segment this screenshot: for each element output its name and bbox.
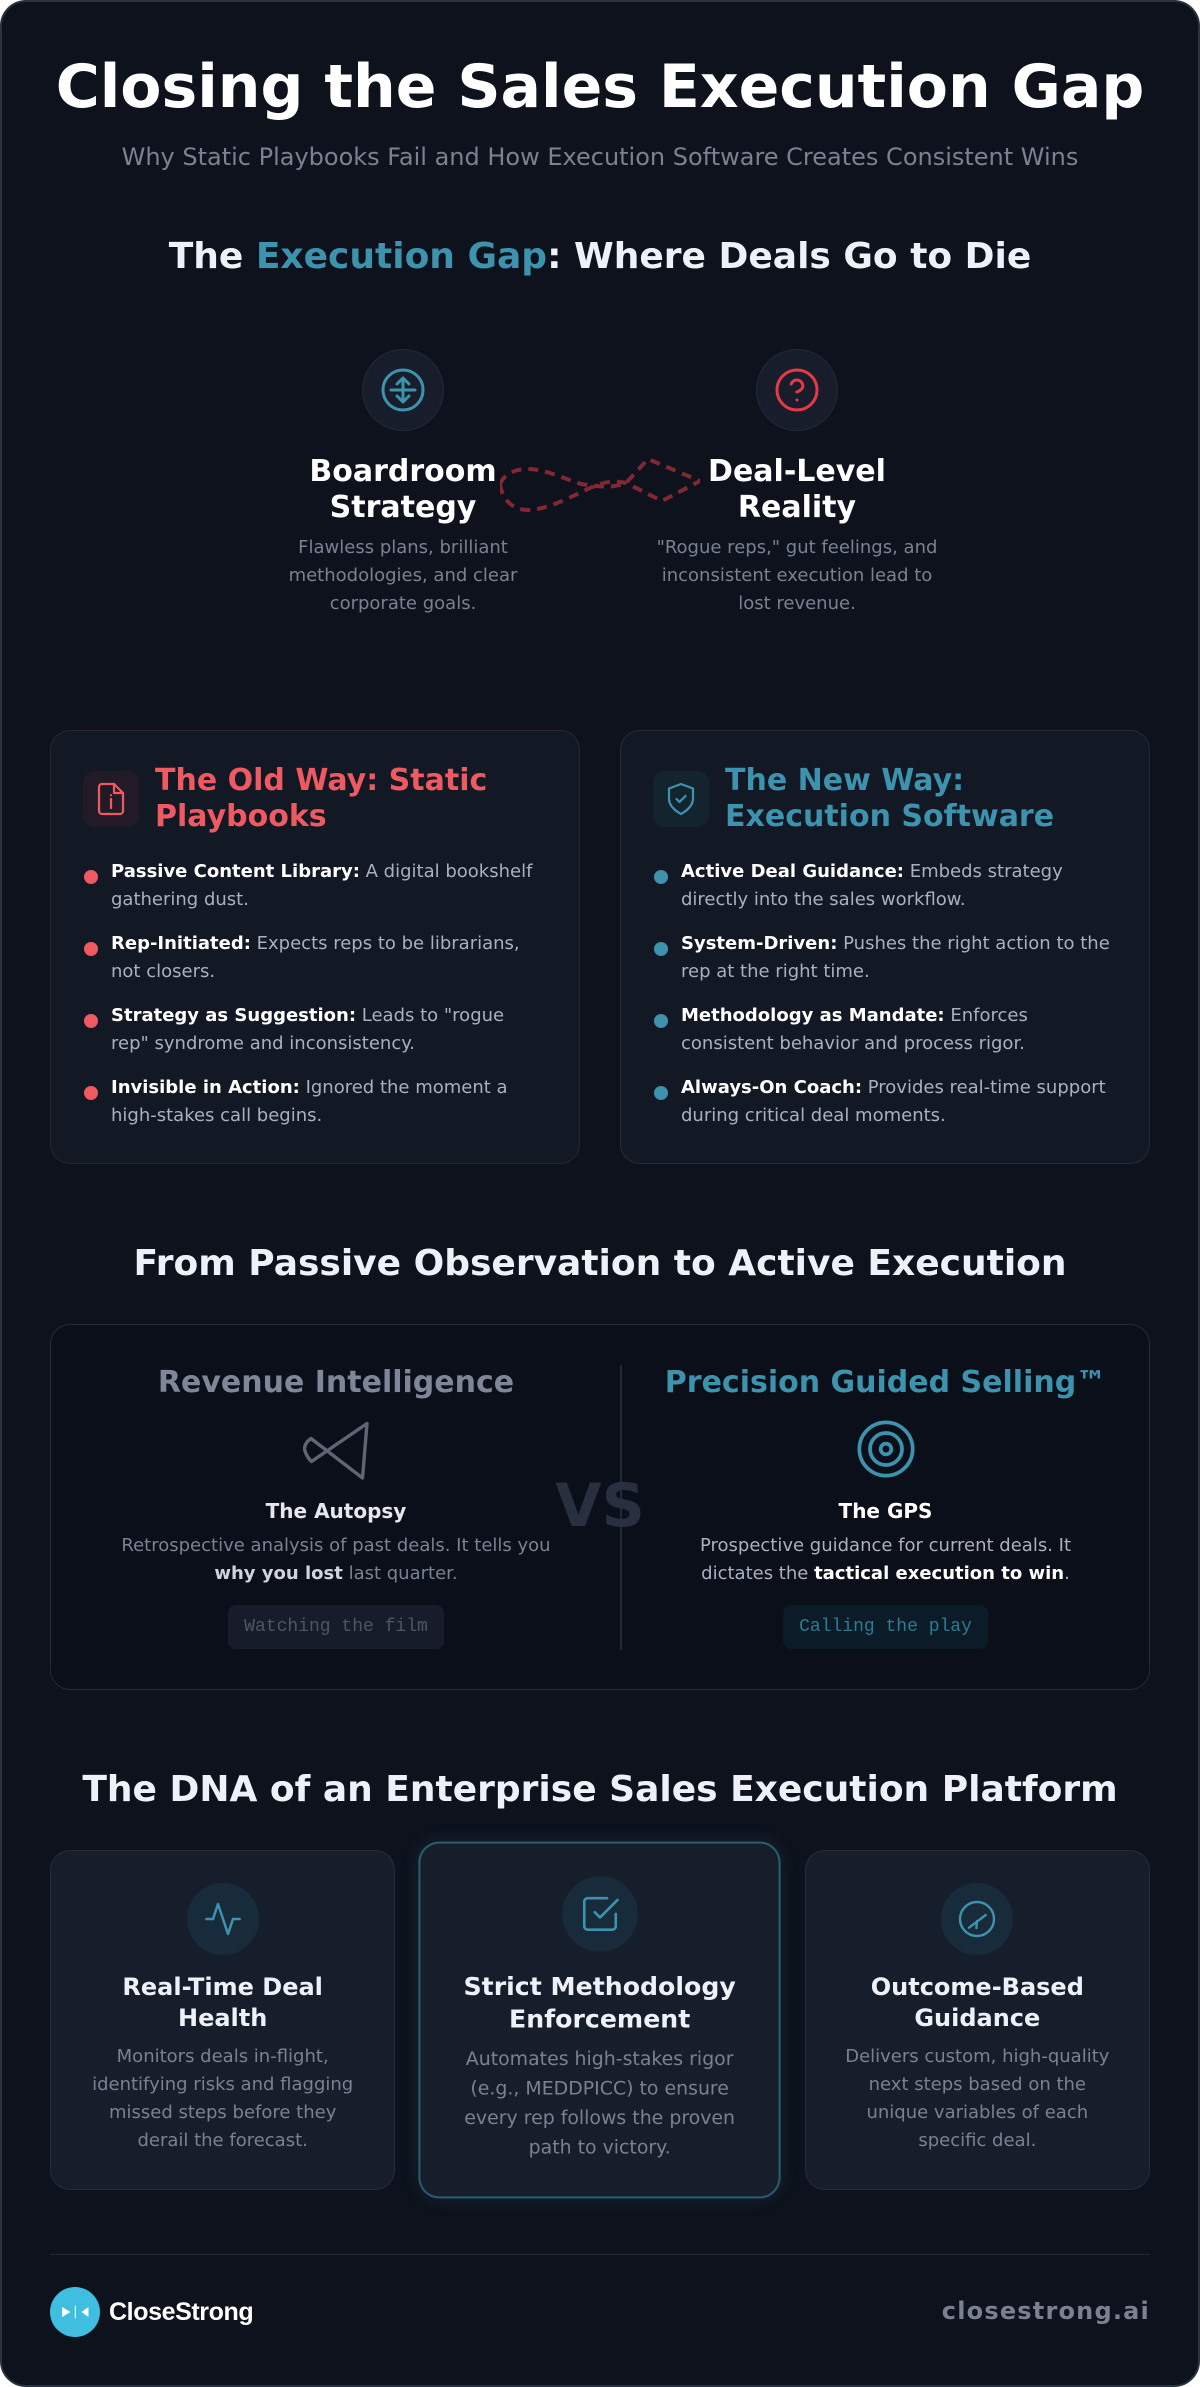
tag: watching the film (228, 1605, 444, 1649)
item (111, 1077, 508, 1126)
bullet (84, 942, 98, 956)
autopsy description (121, 1535, 551, 1584)
logo wordmark: CloseStrong (109, 2298, 253, 2326)
bullet (654, 870, 668, 884)
card description (92, 2046, 353, 2151)
card description (845, 2046, 1109, 2151)
panel: real-time deal health (50, 1850, 395, 2190)
card description: next steps based on the (869, 2074, 1086, 2095)
old way heading: The Old Way: Static (155, 762, 487, 798)
old way heading: Playbooks (155, 798, 327, 834)
panel: outcome-based guidance (805, 1850, 1150, 2190)
card description: specific deal. (918, 2130, 1036, 2151)
card description: Monitors deals in-flight, (117, 2046, 329, 2067)
GPS subheading: The GPS (839, 1499, 932, 1523)
boardroom description: Flawless plans, brilliant (298, 536, 508, 558)
panel: deal-level reality (657, 349, 937, 614)
card title (464, 1972, 736, 2034)
bullet (84, 1086, 98, 1100)
reality heading: Deal-Level (708, 454, 886, 489)
title: Closing the Sales Execution Gap (56, 52, 1144, 122)
card description (465, 2048, 735, 2159)
autopsy description: Retrospective analysis of past deals. It tells you (121, 1535, 551, 1556)
item: rep" syndrome and inconsistency. (111, 1033, 415, 1054)
logo mark (50, 2287, 100, 2337)
card description: missed steps before they (109, 2102, 336, 2123)
icon: gauge dial (941, 1883, 1013, 1955)
bullet (84, 870, 98, 884)
icon: question circle (756, 349, 838, 431)
item: Rep-Initiated: Expects reps to be librarians, (111, 933, 520, 954)
icon: target (858, 1420, 914, 1478)
card description: path to victory. (529, 2137, 671, 2159)
reality description: "Rogue reps," gut feelings, and (657, 536, 937, 558)
heading: passive to active: From Passive Observation to Active Execution (133, 1242, 1067, 1284)
panel: boardroom strategy (289, 349, 518, 614)
card title: Strict Methodology (464, 1972, 736, 2001)
item (681, 1077, 1106, 1126)
panel: revenue intelligence versus precision guided selling (50, 1324, 1150, 1690)
item: Strategy as Suggestion: Leads to "rogue (111, 1005, 504, 1026)
item: directly into the sales workflow. (681, 889, 966, 910)
reality description: lost revenue. (738, 592, 856, 614)
new way heading: Execution Software (725, 798, 1054, 834)
reality description (657, 536, 937, 614)
reality heading (708, 454, 886, 525)
autopsy description: why you lost last quarter. (214, 1563, 458, 1584)
heading: the DNA: The DNA of an Enterprise Sales Execution Platform (82, 1769, 1118, 1810)
item: Passive Content Library: A digital bookshelf (111, 861, 532, 882)
item: during critical deal moments. (681, 1105, 946, 1126)
revenue intelligence heading: Revenue Intelligence (158, 1364, 514, 1400)
item: System-Driven: Pushes the right action to the (681, 933, 1110, 954)
item (681, 861, 1063, 910)
boardroom heading (309, 454, 497, 525)
icon: file info (83, 771, 139, 827)
item: not closers. (111, 961, 215, 982)
card description: identifying risks and flagging (92, 2074, 353, 2095)
item (681, 933, 1110, 982)
new way heading (725, 762, 1054, 834)
GPS description (700, 1535, 1071, 1584)
reality heading: Reality (738, 490, 856, 525)
item (111, 1005, 504, 1054)
item: rep at the right time. (681, 961, 870, 982)
VS label: VS (555, 1471, 645, 1541)
GPS description: dictates the tactical execution to win. (701, 1563, 1070, 1584)
item: Invisible in Action: Ignored the moment a (111, 1077, 508, 1098)
precision guided selling heading: Precision Guided Selling™ (665, 1364, 1106, 1400)
item: Active Deal Guidance: Embeds strategy (681, 861, 1063, 882)
card description: every rep follows the proven (465, 2107, 735, 2129)
new way list (654, 861, 1110, 1126)
card description: unique variables of each (866, 2102, 1088, 2123)
icon: activity pulse (187, 1883, 259, 1955)
subtitle: Why Static Playbooks Fail and How Execution Software Creates Consistent Wins (122, 143, 1078, 171)
boardroom description (289, 536, 518, 614)
column: precision guided selling (665, 1364, 1106, 1649)
card description: (e.g., MEDDPICC) to ensure (471, 2078, 729, 2100)
boardroom heading: Strategy (330, 490, 476, 525)
tag: calling the play: Calling the play (799, 1617, 972, 1637)
item: Always-On Coach: Provides real-time support (681, 1077, 1106, 1098)
website: closestrong.ai (942, 2297, 1150, 2325)
bullet (84, 1014, 98, 1028)
icon: check square (562, 1876, 638, 1952)
panel: strict methodology enforcement (419, 1841, 781, 2199)
panel: the new way (620, 730, 1150, 1164)
reality description: inconsistent execution lead to (662, 564, 932, 586)
item: high-stakes call begins. (111, 1105, 322, 1126)
column: revenue intelligence (121, 1364, 551, 1649)
bullet (654, 1014, 668, 1028)
bullet (654, 1086, 668, 1100)
card title: Guidance (914, 2004, 1040, 2032)
item: gathering dust. (111, 889, 249, 910)
card title (122, 1973, 323, 2032)
new way heading: The New Way: (725, 762, 964, 798)
item (111, 861, 533, 910)
tag: calling the play (783, 1605, 988, 1649)
icon: autopsy (303, 1422, 369, 1480)
icon: shield check (653, 771, 709, 827)
item: consistent behavior and process rigor. (681, 1033, 1025, 1054)
boardroom description: corporate goals. (330, 592, 476, 614)
item (111, 933, 520, 982)
card title: Outcome-Based (871, 1973, 1084, 2001)
panel: the old way (50, 730, 580, 1164)
boardroom heading: Boardroom (309, 454, 497, 489)
item (681, 1005, 1028, 1054)
autopsy subheading: The Autopsy (266, 1499, 406, 1523)
card title (871, 1973, 1084, 2032)
bullet (654, 942, 668, 956)
item: Methodology as Mandate: Enforces (681, 1005, 1028, 1026)
card title: Health (178, 2004, 267, 2032)
card background (620, 730, 1150, 1164)
GPS description: Prospective guidance for current deals. It (700, 1535, 1071, 1556)
arrow: chaotic dashed connector (500, 458, 700, 512)
card background (50, 730, 580, 1164)
card description: Delivers custom, high-quality (845, 2046, 1109, 2067)
heading: the execution gap: The Execution Gap: Where Deals Go to Die (169, 236, 1031, 277)
card title: Enforcement (509, 2004, 691, 2034)
card description: derail the forecast. (137, 2130, 308, 2151)
footer (50, 2254, 1150, 2344)
divider line (620, 1365, 622, 1650)
card description: Automates high-stakes rigor (466, 2048, 734, 2070)
boardroom description: methodologies, and clear (289, 564, 517, 586)
card title: Real-Time Deal (122, 1973, 323, 2001)
icon: strategy circle (362, 349, 444, 431)
old way list (84, 861, 533, 1126)
old way heading (155, 762, 487, 834)
tag: watching the film: Watching the film (244, 1617, 428, 1637)
